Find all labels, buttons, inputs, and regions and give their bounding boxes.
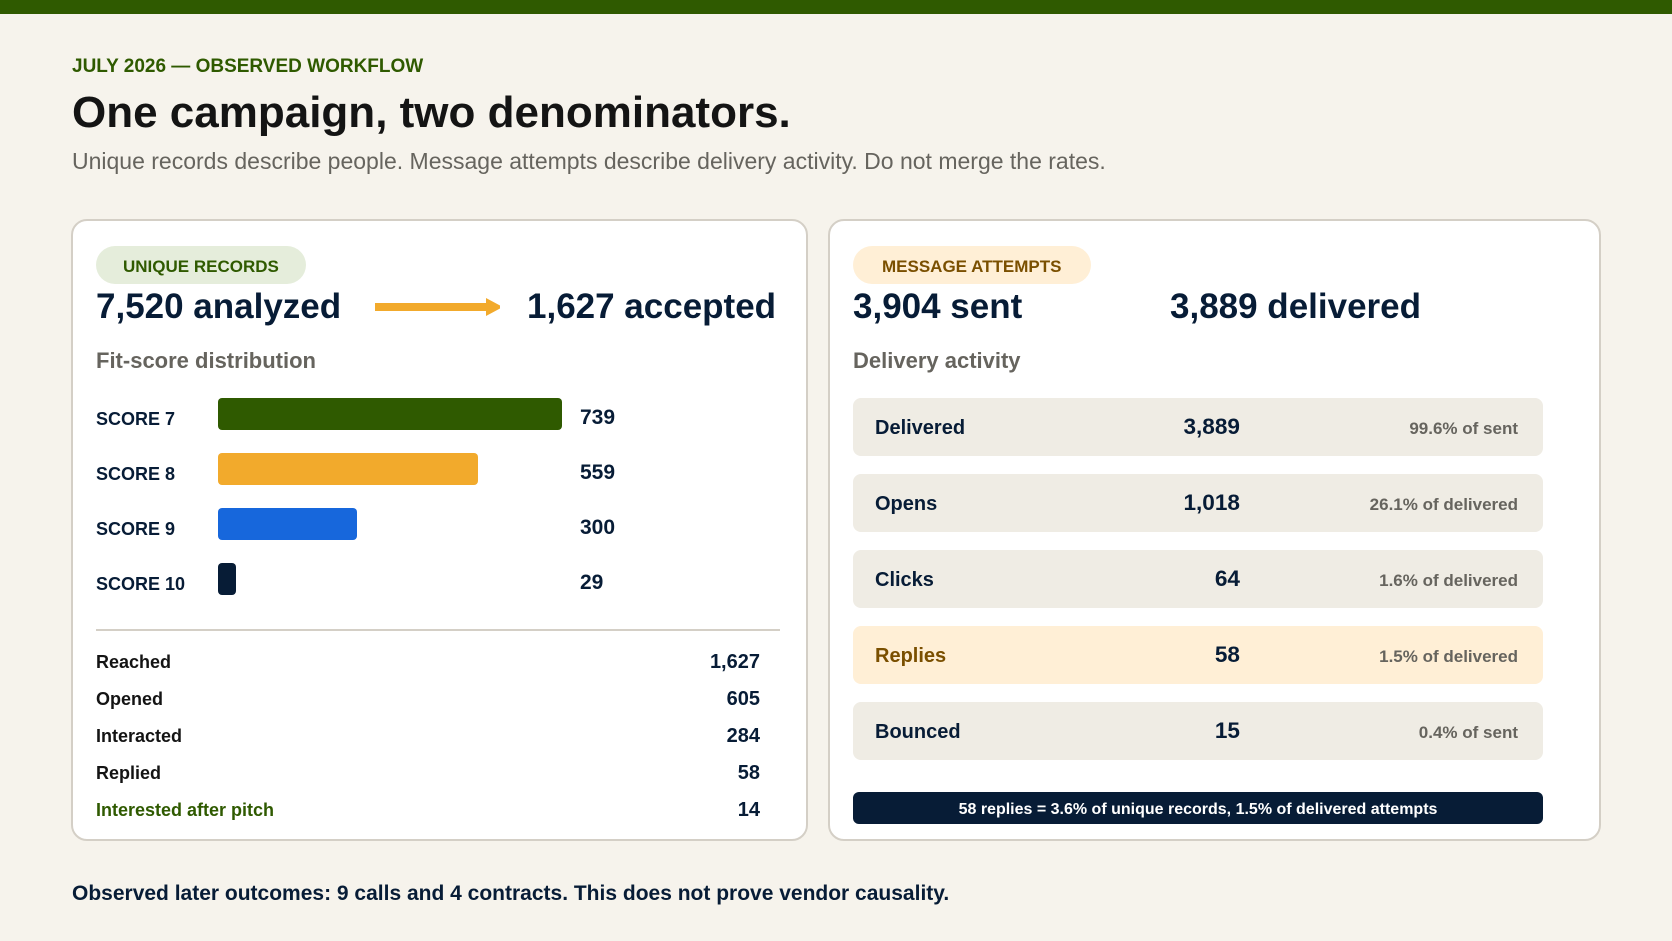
- top accent bar: [0, 0, 1672, 14]
- bar: score 9: [218, 508, 357, 540]
- row: delivered: 99.6% of sent: [1409, 419, 1518, 438]
- bar: score 7: [218, 398, 562, 430]
- value: score 8: 559: [580, 461, 615, 484]
- row: clicks: Clicks: [875, 569, 934, 591]
- footnote: Observed later outcomes: 9 calls and 4 contracts. This does not prove vendor causality.: [72, 882, 949, 905]
- stat: analyzed: 7,520 analyzed: [96, 287, 341, 326]
- funnel row: opened: Opened: [96, 689, 163, 709]
- row: bounced: 0.4% of sent: [1419, 723, 1518, 742]
- stat: accepted: 1,627 accepted: [527, 287, 776, 326]
- funnel row: interested after pitch: Interested after pitch: [96, 800, 274, 820]
- row: delivered: 3,889: [1183, 414, 1240, 439]
- heading: delivery activity: Delivery activity: [853, 348, 1021, 373]
- pill: unique records: [96, 246, 306, 284]
- row: opens: 26.1% of delivered: [1370, 495, 1518, 514]
- funnel row: reached: Reached: [96, 652, 171, 672]
- row: clicks: 1.6% of delivered: [1379, 571, 1518, 590]
- eyebrow: JULY 2026 — OBSERVED WORKFLOW: [72, 56, 423, 77]
- bar: score 8: [218, 453, 478, 485]
- value: score 10: 29: [580, 571, 603, 594]
- row: opens: Opens: [875, 493, 937, 515]
- bar chart: fit-score distribution: [96, 398, 626, 595]
- row: delivered: [853, 398, 1543, 456]
- bar: score 10: [218, 563, 236, 595]
- value: score 7: 739: [580, 406, 615, 429]
- panel: message attempts: [828, 219, 1601, 841]
- row: bounced: Bounced: [875, 721, 961, 743]
- label: score 10: SCORE 10: [96, 574, 185, 594]
- row: replies: 1.5% of delivered: [1379, 647, 1518, 666]
- row: clicks: 64: [1215, 566, 1240, 591]
- pill: message attempts: [853, 246, 1091, 284]
- subtitle: Unique records describe people. Message attempts describe delivery activity. Do not merge the rates.: [72, 148, 1106, 174]
- callout: replies under both denominators: [853, 792, 1543, 824]
- heading: fit-score distribution: Fit-score distribution: [96, 348, 316, 373]
- label: score 9: SCORE 9: [96, 519, 175, 539]
- row: replies: 58: [1215, 642, 1240, 667]
- funnel value: replied: 58: [738, 762, 760, 784]
- funnel value: opened: 605: [727, 688, 760, 710]
- title: One campaign, two denominators.: [72, 88, 791, 137]
- funnel value: interacted: 284: [727, 725, 760, 747]
- row: replies: Replies: [875, 645, 946, 667]
- row: opens: 1,018: [1183, 490, 1240, 515]
- arrow: analyzed to accepted: [375, 298, 500, 316]
- funnel value: interested after pitch: 14: [738, 799, 760, 821]
- row: replies: [853, 626, 1543, 684]
- row: opens: [853, 474, 1543, 532]
- funnel value: reached: 1,627: [710, 651, 760, 673]
- funnel row: interacted: Interacted: [96, 726, 182, 746]
- callout: replies under both denominators: 58 replies = 3.6% of unique records, 1.5% of delivered attempts: [959, 801, 1437, 818]
- panel: unique records: [71, 219, 808, 841]
- label: score 7: SCORE 7: [96, 409, 175, 429]
- row: clicks: [853, 550, 1543, 608]
- stat: sent: 3,904 sent: [853, 287, 1022, 326]
- row: bounced: 15: [1215, 718, 1240, 743]
- row: bounced: [853, 702, 1543, 760]
- pill label: unique records: UNIQUE RECORDS: [123, 257, 279, 276]
- pill label: message attempts: MESSAGE ATTEMPTS: [882, 257, 1061, 276]
- value: score 9: 300: [580, 516, 615, 539]
- row: delivered: Delivered: [875, 417, 965, 439]
- funnel row: replied: Replied: [96, 763, 161, 783]
- stat: delivered: 3,889 delivered: [1170, 287, 1421, 326]
- label: score 8: SCORE 8: [96, 464, 175, 484]
